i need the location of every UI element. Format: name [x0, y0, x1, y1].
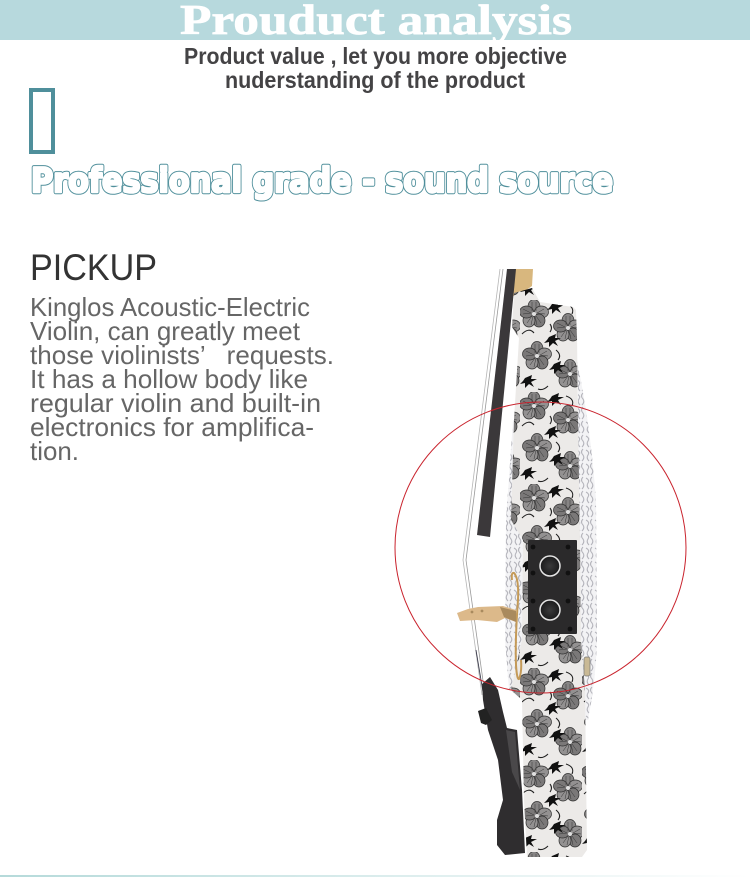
tailpiece and chin rest — [482, 677, 525, 855]
description text: regular violin and built-in — [30, 388, 321, 418]
subtitle — [184, 43, 567, 93]
icon: missing glyph rectangle — [31, 90, 53, 152]
description text: It has a hollow body like — [30, 364, 308, 394]
bridge — [457, 606, 516, 622]
patterned scroll block — [512, 288, 577, 338]
output jack — [584, 657, 590, 676]
outlined section heading: Professional grade - sound source — [31, 161, 613, 201]
heading: pickup: PICKUP — [30, 247, 157, 288]
subtitle: nuderstanding of the product — [225, 67, 525, 93]
bottom rule — [0, 875, 750, 877]
description text: those violinists’ requests. — [30, 340, 334, 370]
knob two — [540, 600, 560, 620]
strings — [463, 269, 503, 695]
patterned ribs — [511, 336, 587, 857]
fine tuner — [478, 708, 492, 725]
knob one — [540, 556, 560, 576]
violin side view — [457, 269, 597, 857]
wooden neck — [513, 269, 533, 296]
description text: Violin, can greatly meet — [30, 316, 301, 346]
description text: electronics for amplifica- — [30, 412, 314, 442]
description text: tion. — [30, 436, 79, 466]
description text — [30, 292, 334, 466]
f-hole — [512, 573, 521, 679]
header band — [0, 0, 750, 44]
fingerboard — [477, 269, 516, 537]
red highlight circle — [395, 402, 686, 693]
outlined section heading: Professional grade - sound source — [31, 161, 613, 201]
chin rest highlight — [506, 730, 520, 790]
description text: Kinglos Acoustic-Electric — [30, 292, 310, 322]
subtitle: Product value , let you more objective — [184, 43, 567, 69]
pickup control plate — [528, 540, 577, 634]
translucent body edge — [505, 362, 597, 720]
